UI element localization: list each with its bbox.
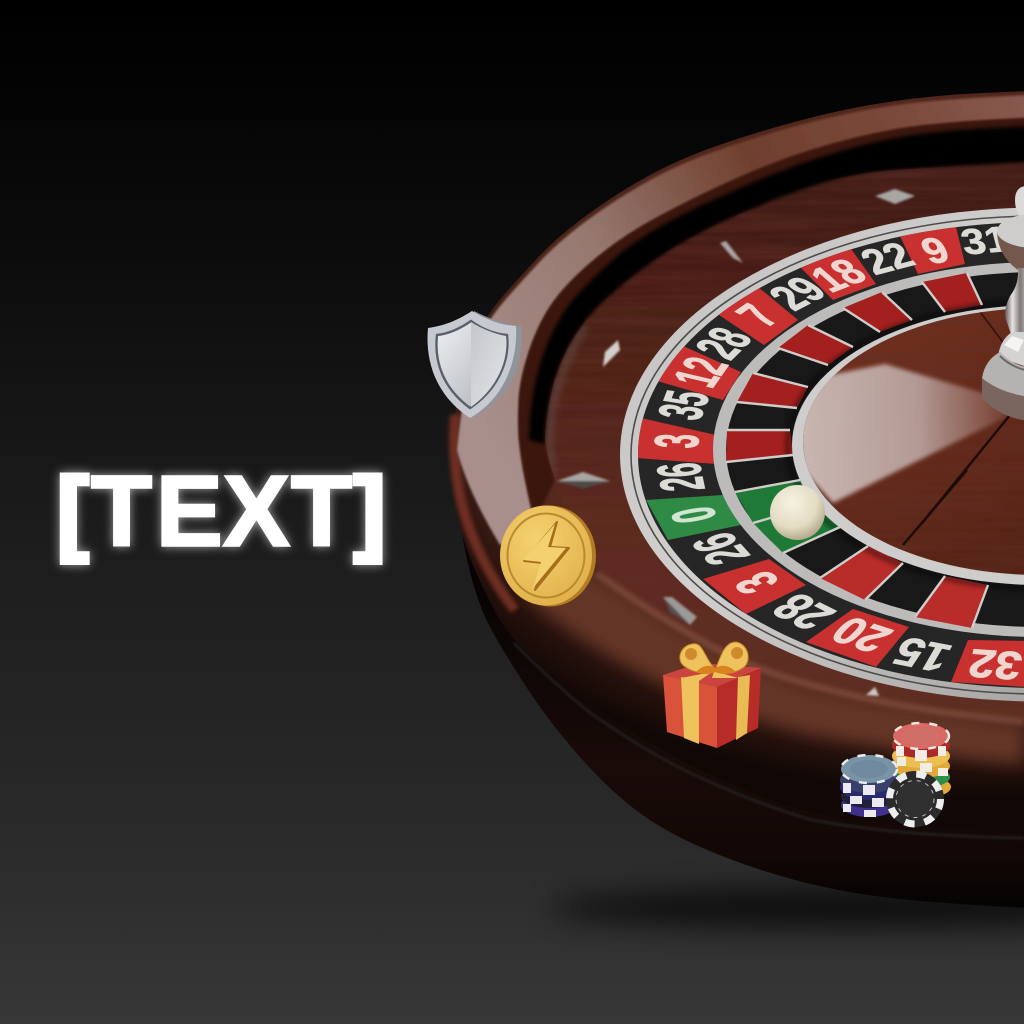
title placeholder text: ] [354,458,385,563]
silver spindle [982,186,1024,421]
inner silver band [713,262,1024,637]
black chip [886,771,944,827]
gift box body [663,663,761,748]
pocket numbers: 18 [799,251,877,300]
icon: silver shield [427,311,521,418]
pocket numbers: 7 [724,298,792,334]
pocket numbers: 3 [642,433,713,449]
wooden ball track [530,160,1024,750]
pocket numbers: 26 [678,527,763,571]
pocket numbers: 35 [644,387,723,423]
icon: gold lightning coin [500,506,596,606]
pocket numbers: 28 [682,321,766,365]
pocket numbers: 0 [657,502,730,528]
diamond deflectors [557,189,915,696]
title placeholder text: TEXT [91,456,352,568]
icon: red gift box [663,642,761,748]
pocket frets [726,273,988,628]
red and gold chip stack [892,723,951,798]
wooden center cone [798,305,1024,580]
ivory ball [770,485,825,540]
pocket numbers: 31 [957,219,1014,263]
title placeholder text: [ [57,458,88,563]
pocket numbers: 26 [644,461,719,493]
inner cone silver ring [792,305,1024,585]
pocket numbers: 12 [659,352,742,392]
gift bow [680,642,748,674]
roulette wheel [452,91,1024,908]
pocket numbers: 29 [758,270,839,318]
pocket numbers: 9 [914,230,957,272]
wheel shadow on floor [550,888,1024,928]
pocket numbers [642,219,1024,688]
outer silver ring [620,208,1024,702]
pocket numbers: 28 [759,586,847,638]
pocket numbers: 15 [886,628,959,679]
pocket numbers: 22 [851,234,923,282]
wooden outer rim [452,91,1024,835]
inner ball pockets [726,272,1024,628]
wheel lower body [457,500,1024,908]
pocket numbers: 20 [822,608,902,660]
pocket numbers: 3 [721,564,792,601]
blue chip stack [840,755,898,817]
number ring pockets [636,222,1024,692]
icon: casino chip stacks [840,723,951,827]
